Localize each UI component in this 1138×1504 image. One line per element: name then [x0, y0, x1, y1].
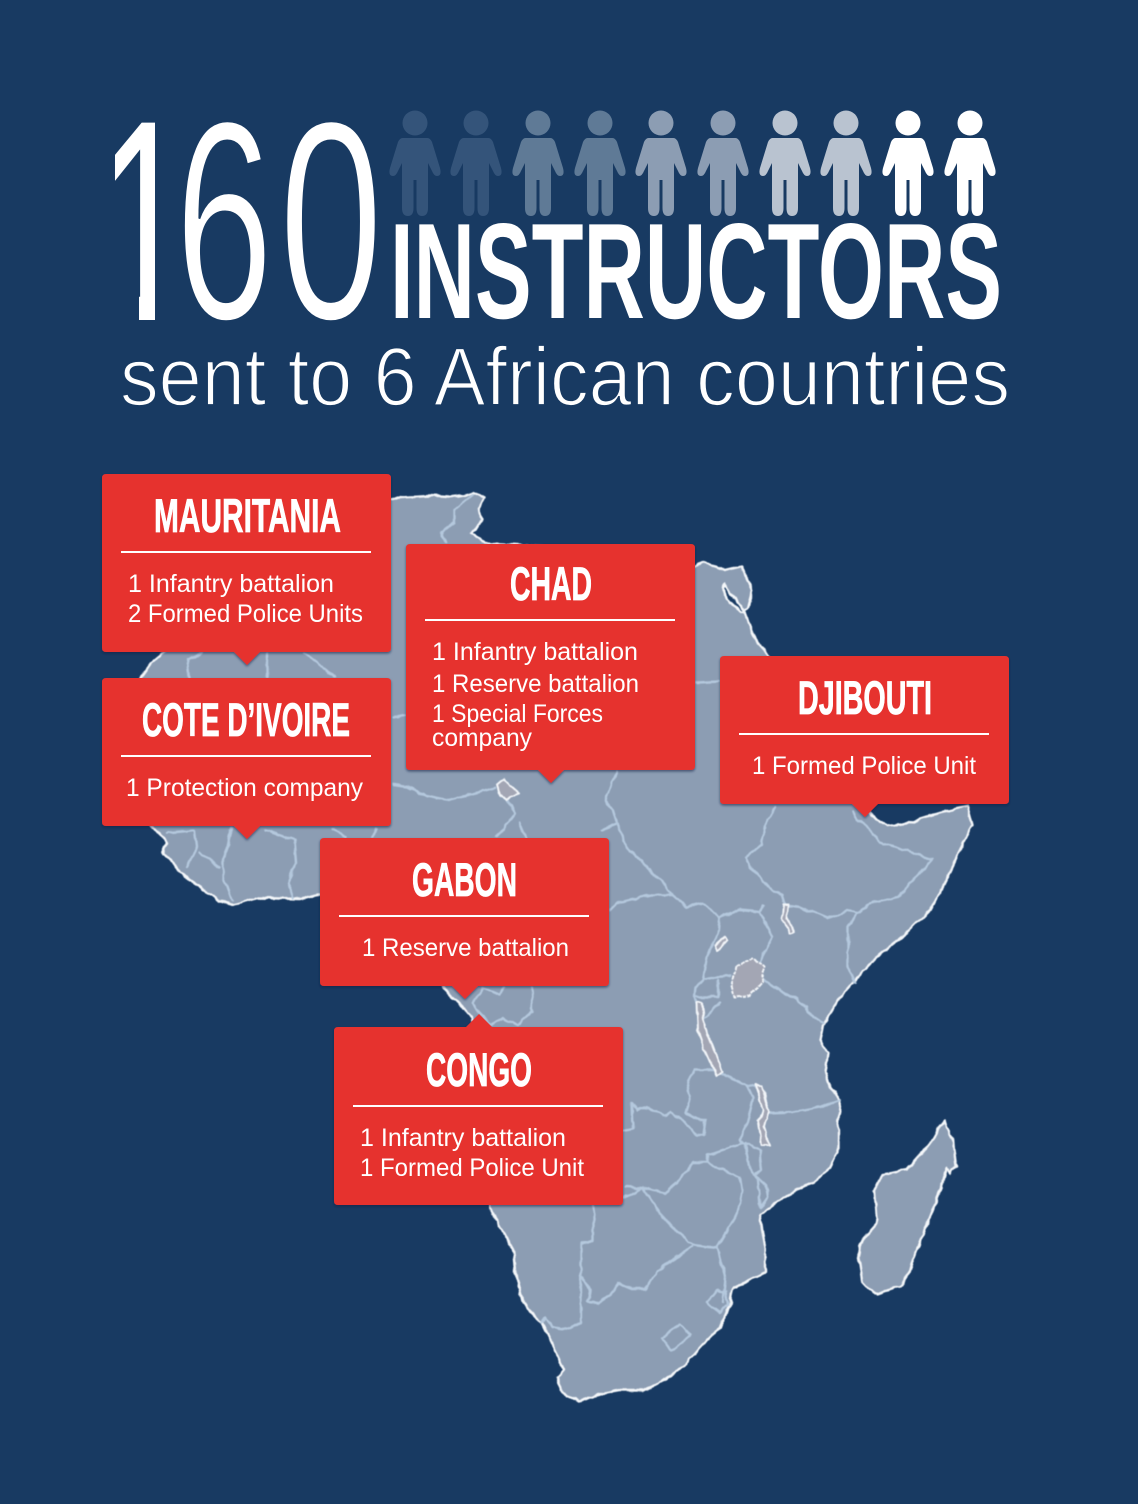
icon: person 1 [389, 110, 441, 216]
units list: Chad: 1 Infantry battalion [432, 638, 638, 666]
icon: person 6 [697, 110, 749, 216]
units list: Congo [360, 1124, 584, 1182]
icon: person 10 [944, 110, 996, 216]
icon: person 4 [574, 110, 626, 216]
units list: Djibouti: 1 Formed Police Unit [752, 752, 976, 780]
callout: Djibouti [720, 656, 1009, 817]
row of ten person icons [389, 110, 996, 216]
icon: person 9 [882, 110, 934, 216]
Lake Albert [715, 937, 727, 951]
subtitle: sent to 6 African countries [120, 330, 1010, 423]
icon: person 3 [512, 110, 564, 216]
units list: Gabon: 1 Reserve battalion [362, 934, 569, 962]
number 160: 1 [100, 63, 190, 380]
Lake Chad [497, 780, 519, 800]
icon: person 2 [450, 110, 502, 216]
title: 160 instructors [115, 122, 999, 320]
number 160: 6 [175, 63, 273, 380]
units list: Mauritania: 1 Infantry battalion [128, 570, 334, 598]
Lake Malawi [756, 1085, 769, 1145]
units list: Chad: 1 Special Forces [432, 700, 603, 728]
national borders [167, 495, 932, 1352]
Madagascar [858, 1121, 956, 1294]
heading: Djibouti: DJIBOUTI [798, 671, 932, 724]
units list: Chad: 1 Reserve battalion [432, 670, 639, 698]
callout: Chad [406, 544, 695, 783]
callout: Mauritania [102, 474, 391, 665]
callout: Congo [334, 1014, 623, 1205]
icon: person 5 [635, 110, 687, 216]
mainland silhouette [120, 493, 973, 1401]
lakes [497, 780, 794, 1145]
units list: Congo: 1 Infantry battalion [360, 1124, 566, 1152]
units list: Chad: company [432, 724, 532, 752]
heading: Cote d'Ivoire: COTE D’IVOIRE [142, 693, 350, 746]
units list: Chad [432, 638, 639, 752]
number 160 [115, 122, 375, 320]
units list: Mauritania: 2 Formed Police Units [128, 600, 363, 628]
Lake Turkana [782, 904, 794, 934]
heading: Mauritania: MAURITANIA [154, 489, 341, 542]
units list: Cote d'Ivoire: 1 Protection company [126, 774, 363, 802]
number 160: 0 [279, 63, 383, 380]
map of Africa [120, 493, 973, 1401]
heading: Gabon: GABON [412, 853, 517, 906]
callout: Cote d'Ivoire [102, 678, 391, 839]
Lake Tanganyika [697, 1003, 722, 1075]
units list: Congo: 1 Formed Police Unit [360, 1154, 584, 1182]
heading: Chad: CHAD [510, 557, 592, 610]
callout: Gabon [320, 838, 609, 999]
icon: person 8 [820, 110, 872, 216]
heading: Congo: CONGO [426, 1043, 532, 1096]
units list: Mauritania [128, 570, 363, 628]
Lake Victoria [731, 958, 764, 997]
icon: person 7 [759, 110, 811, 216]
